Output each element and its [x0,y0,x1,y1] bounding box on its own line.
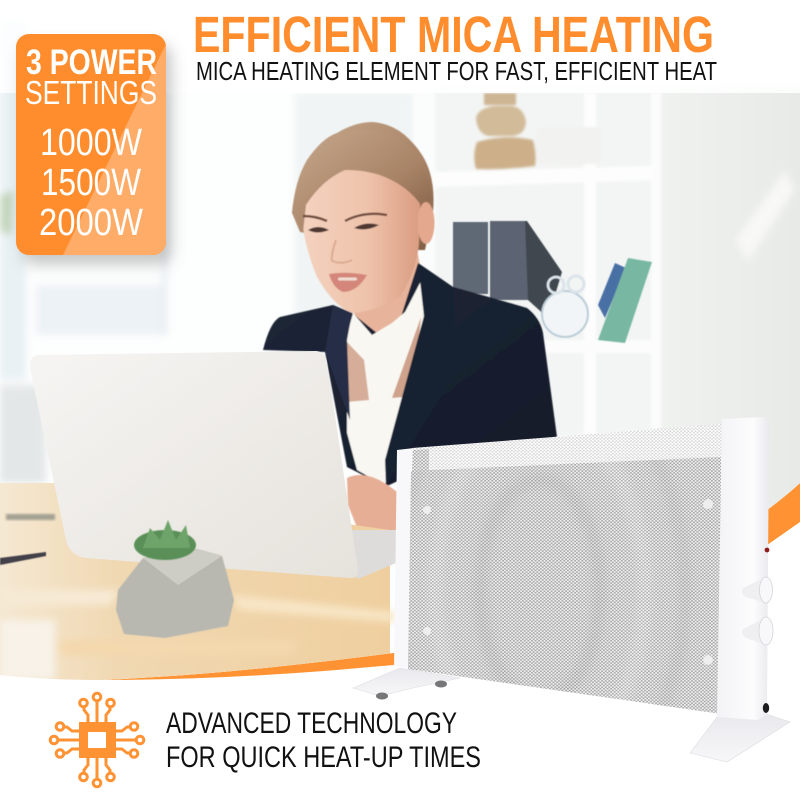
wattage list: 1000W [40,122,142,164]
wall behind woman [295,93,415,318]
ear [418,202,434,244]
orange swoosh [100,483,800,680]
lace left [347,342,369,402]
icon: circuit chip [50,693,144,787]
desk [0,483,390,700]
books [598,258,652,343]
right wall [432,85,800,525]
pot facet [143,549,222,585]
power settings card [16,34,166,255]
alarm clock [542,276,588,337]
succulent [134,520,196,560]
card shadow [22,44,172,265]
mesh panel [408,457,721,714]
photo: woman working at laptop [0,93,800,680]
wattage list [39,122,143,244]
hand [347,475,397,534]
binders [453,221,562,318]
translucent top band [0,0,800,93]
rocker switch [763,703,769,713]
feature text: ADVANCED TECHNOLOGY [166,707,457,740]
card heading [25,43,157,111]
feature text: FOR QUICK HEAT-UP TIMES [166,741,481,774]
mesh top-left corner [412,449,429,472]
mesh fixings [423,499,713,665]
jacket [263,263,557,487]
window [0,93,168,483]
blouse [347,277,424,486]
mica heater product [352,417,790,762]
face [303,168,420,313]
mesh top strip [412,424,721,472]
brows and eyes [303,214,387,221]
right column [717,417,769,720]
card highlight [63,44,166,255]
lace right [392,317,421,398]
lapel [384,264,454,483]
office wall [104,483,800,680]
wattage list: 1500W [41,162,141,204]
power dial [742,617,773,645]
laptop base [352,530,396,579]
right foot [690,713,790,762]
neck [354,253,421,333]
feature text [166,707,481,774]
hair back [292,122,434,250]
laptop lid [30,351,358,578]
left post [394,448,414,668]
jacket collar left [325,305,352,420]
card heading: 3 POWER [26,43,157,82]
woman [263,122,557,534]
wattage list: 2000W [39,202,143,244]
temperature dial [742,577,772,603]
woven baskets [474,93,602,169]
pen on desk [6,514,55,520]
casters [376,680,447,700]
card heading: SETTINGS [25,74,157,111]
plant pot [116,549,234,638]
hair fringe [292,168,420,229]
mesh moire arcs [411,460,688,706]
desk notebook [0,552,46,565]
shelving unit [436,94,660,434]
nose shadow [332,240,352,263]
indicator light [765,548,769,552]
left foot [353,668,460,696]
mouth [329,273,367,292]
